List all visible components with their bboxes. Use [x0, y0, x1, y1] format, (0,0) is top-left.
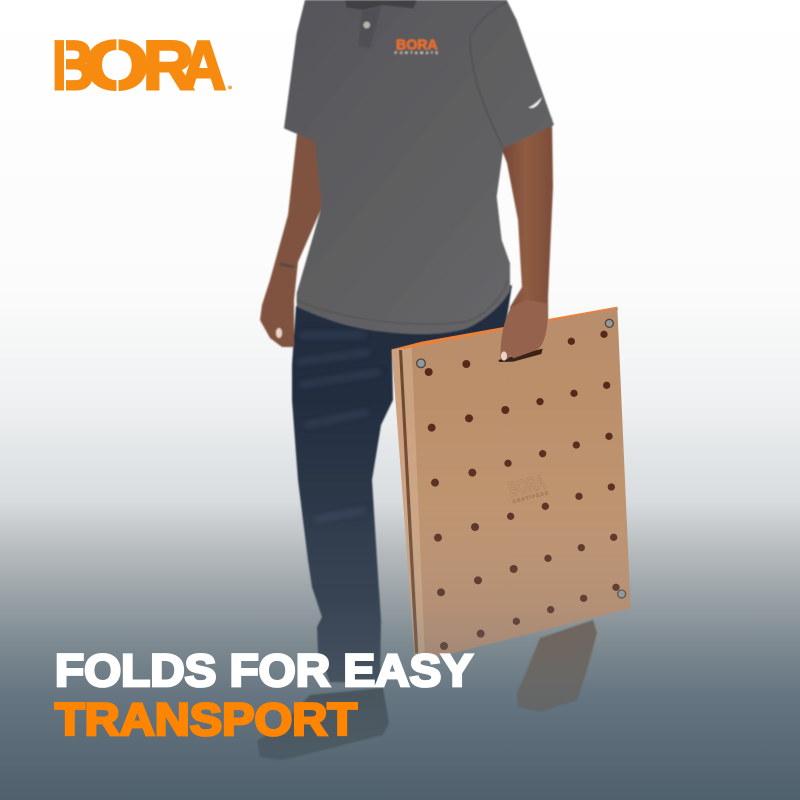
left shoe [257, 688, 389, 760]
BORA logo: A [181, 27, 226, 104]
BORA logo: R [143, 27, 194, 104]
engraved board logo: BORA [506, 470, 548, 502]
placket [360, 8, 380, 48]
fold gap [399, 350, 418, 653]
engraved board logo: CENTIPEDE [512, 490, 550, 505]
collar [345, 0, 417, 10]
headline line 1: FOLDS FOR EASY [55, 645, 473, 696]
collar button [363, 22, 370, 28]
board edge orange strip [392, 307, 618, 350]
rear panel [392, 348, 419, 662]
front panel bevel [403, 347, 425, 662]
right shoe [517, 620, 597, 712]
shirt [284, 0, 554, 334]
shirt logo: BORA [396, 37, 438, 53]
left arm and hand [260, 125, 322, 347]
headline line 2: TRANSPORT [55, 694, 357, 745]
right arm [498, 118, 553, 330]
BORA logo [52, 27, 232, 104]
corner screws [417, 319, 626, 598]
person carrying the folded board [257, 0, 631, 760]
jeans [292, 285, 512, 683]
peg holes [425, 331, 620, 650]
logo stencil cuts [65, 38, 118, 92]
folded board [392, 307, 631, 662]
front panel [403, 308, 631, 662]
BORA logo: O [85, 27, 149, 104]
thumbnail [276, 328, 282, 338]
engraved board logo [508, 474, 548, 503]
headline [55, 645, 473, 745]
jeans highlights [298, 335, 380, 520]
fingernail [501, 351, 507, 361]
sleeve swoosh [528, 97, 542, 108]
BORA logo: B [52, 27, 94, 104]
hand gripping the board [501, 300, 548, 361]
shirt logo: PORTAMATE [395, 51, 439, 55]
shirt hem [297, 280, 508, 324]
handle slot [498, 349, 543, 362]
tattoo [280, 264, 294, 267]
sleeve seam [470, 6, 504, 148]
registered mark [228, 86, 232, 90]
